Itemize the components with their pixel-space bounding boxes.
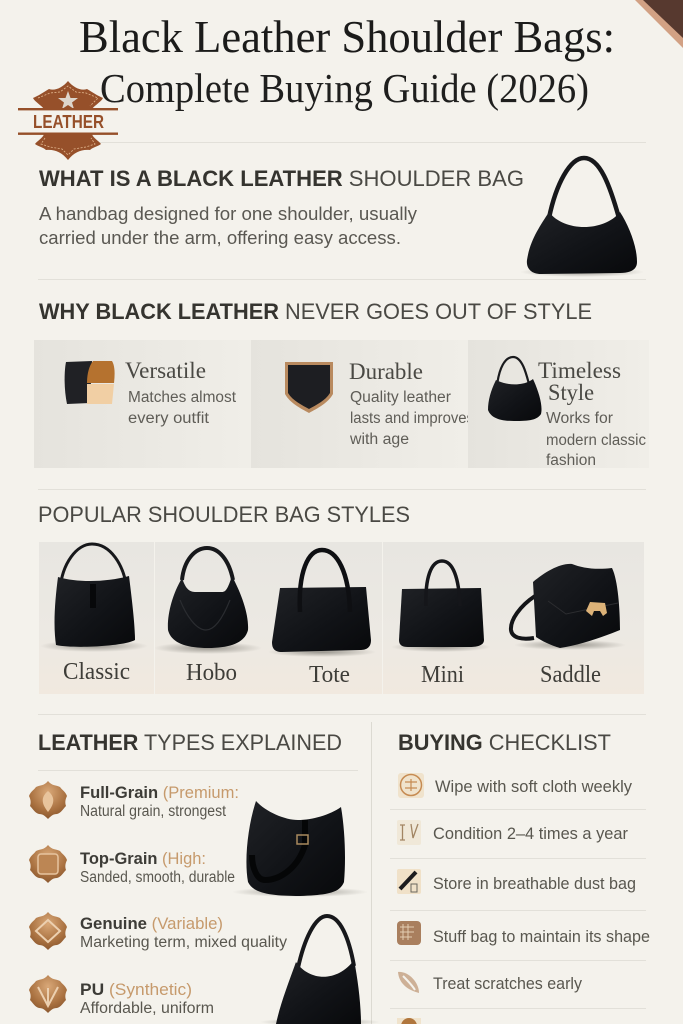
text: top-grain: Top-Grain (High:: [80, 850, 206, 868]
icon: stuffing: [397, 921, 421, 945]
icon: top-grain: [29, 845, 67, 883]
heading: popular styles: POPULAR SHOULDER BAG STYLES: [38, 502, 410, 527]
panel: durable: Quality leather: [350, 389, 451, 406]
panel: versatile: every outfit: [128, 410, 210, 427]
text: genuine: Genuine (Variable): [80, 915, 223, 933]
heading: what is: WHAT IS A BLACK LEATHER SHOULDER BAG: [39, 166, 524, 191]
icon: cropped last item: [397, 1018, 421, 1024]
text: full-grain: Full-Grain (Premium:: [80, 784, 239, 802]
panel: classic: Classic: [63, 659, 130, 685]
icon: dust bag: [397, 869, 421, 894]
bag: buckle hobo: [232, 801, 368, 897]
icon: shield: [285, 362, 333, 413]
heading: buying checklist: BUYING CHECKLIST: [398, 730, 611, 755]
badge: leather: [18, 81, 118, 160]
text block: definition: [39, 203, 418, 248]
icon: conditioner: [397, 820, 421, 845]
text: top-grain: Sanded, smooth, durable: [80, 869, 235, 886]
text: full-grain: Natural grain, strongest: [80, 803, 227, 820]
icon: full-grain: [29, 781, 67, 819]
panel: durable: lasts and improves: [350, 410, 474, 427]
text: pu: PU (Synthetic): [80, 981, 192, 999]
panel: timeless style: [468, 340, 649, 469]
panel: timeless style: Style: [548, 380, 594, 405]
icon: small handbag: [488, 357, 542, 421]
text: treat: Treat scratches early: [433, 975, 583, 993]
panel: versatile: Matches almost: [128, 389, 237, 406]
text: store: Store in breathable dust bag: [433, 875, 636, 893]
bag: shoulder bag cropped: [260, 916, 380, 1024]
text: top-grain: [80, 850, 235, 886]
panel: saddle: [500, 542, 644, 694]
icon: pu: [29, 975, 67, 1013]
text: full-grain: [80, 784, 239, 820]
panel: timeless style: Works for: [546, 410, 613, 427]
panel: timeless style: modern classic: [546, 432, 646, 449]
panel: buying checklist: [390, 730, 650, 1024]
panel: hobo: Hobo: [186, 660, 237, 686]
title: [79, 11, 615, 111]
panel: mini: Mini: [421, 662, 464, 688]
text block: definition: A handbag designed for one shoulder, usually: [39, 203, 418, 224]
corner leather accent: [635, 0, 683, 48]
panel: timeless style: Timeless: [538, 358, 621, 383]
text: stuff: Stuff bag to maintain its shape: [433, 928, 650, 946]
heading: leather types: LEATHER TYPES EXPLAINED: [38, 730, 342, 755]
title: Complete Buying Guide (2026): [100, 65, 589, 111]
text: genuine: [80, 915, 287, 951]
panel: timeless style: fashion: [546, 452, 596, 469]
icon: colour swatches: [65, 361, 115, 404]
panel: leather types: [29, 730, 380, 1024]
panel: classic: [39, 542, 154, 694]
panel: versatile: Versatile: [125, 358, 206, 383]
text: pu: Affordable, uniform: [80, 1000, 214, 1017]
panel: tote: [268, 542, 382, 694]
panel: hobo: [154, 542, 270, 694]
panel: versatile: [34, 340, 251, 468]
text block: definition: carried under the arm, offering easy access.: [39, 227, 401, 248]
panel: durable: Durable: [349, 359, 423, 384]
badge: leather: LEATHER: [33, 112, 104, 132]
icon: scratch leaf: [398, 972, 419, 993]
icon: genuine: [29, 912, 67, 950]
title: Black Leather Shoulder Bags:: [79, 11, 615, 62]
panel: tote: Tote: [309, 662, 350, 688]
panel: saddle: Saddle: [540, 662, 601, 688]
panel: mini: [383, 542, 500, 694]
text: wipe: Wipe with soft cloth weekly: [435, 778, 633, 796]
bag: hero shoulder bag: [520, 158, 644, 277]
heading: why black leather: WHY BLACK LEATHER NEVER GOES OUT OF STYLE: [39, 299, 592, 324]
panel: durable: [251, 340, 474, 468]
text: genuine: Marketing term, mixed quality: [80, 934, 287, 951]
icon: cloth: [398, 773, 424, 798]
text: pu: [80, 981, 214, 1017]
panel: durable: with age: [349, 431, 409, 448]
text: condition: Condition 2–4 times a year: [433, 825, 628, 843]
